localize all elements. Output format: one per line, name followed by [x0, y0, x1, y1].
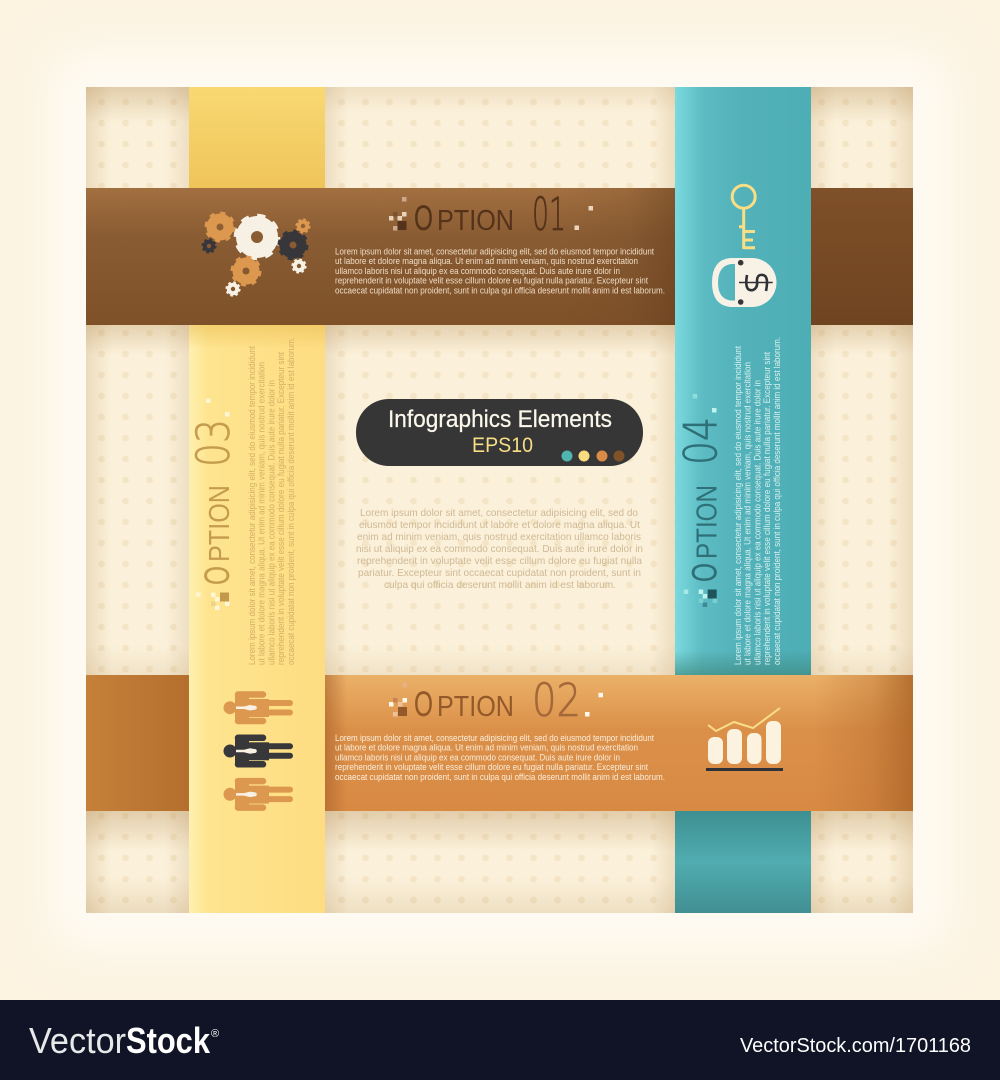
text block: option 04 [733, 337, 782, 665]
ribbon: teal vertical [675, 87, 811, 913]
text block: option 01 [335, 246, 665, 295]
text block: center paragraph [356, 508, 643, 591]
icon: gears [202, 214, 310, 296]
panel: dotted paper [86, 87, 913, 913]
heading: option 03: O [198, 566, 237, 585]
heading: option 04: O [686, 563, 725, 582]
text block: option 03: Lorem ipsum dolor sit amet, consectetur adipisicing elit, sed do eiusmod tempor incididunt [247, 345, 257, 665]
text block: option 04: ut labore et dolore magna aliqua. Ut enim ad minim veniam, quis nostrud exercitation [743, 362, 753, 665]
text block: center paragraph: eiusmod tempor incididunt ut labore et dolore magna aliqua. Ut [359, 520, 640, 531]
text block: option 03: occaecat cupidatat non proident, sunt in culpa qui officia deserunt mollit anim id est laborum. [286, 337, 296, 665]
icon: padlock with dollar sign [712, 258, 776, 307]
footer bar: Stock [126, 1020, 211, 1061]
text block: center paragraph: enim ad minim veniam, quis nostrud exercitation ullamco laboris [357, 532, 641, 543]
center badge: infographics elements: EPS10 [472, 434, 533, 457]
text block: option 02 [335, 733, 665, 782]
text block: option 02: reprehenderit in voluptate velit esse cillum dolore eu fugiat nulla pariatur. Excepteur sint [335, 762, 649, 772]
footer bar: Vector [29, 1020, 126, 1061]
text block: option 04: reprehenderit in voluptate velit esse cillum dolore eu fugiat nulla pariatur. Excepteur sint [762, 351, 772, 665]
text block: center paragraph: pariatur. Excepteur sint occaecat cupidatat non proident, sunt in [358, 568, 641, 579]
text block: option 01: reprehenderit in voluptate velit esse cillum dolore eu fugiat nulla pariatur. Excepteur sint [335, 276, 649, 286]
text block: option 02: Lorem ipsum dolor sit amet, consectetur adipisicing elit, sed do eiusmod tempor incididunt [335, 733, 655, 743]
heading: option 01 [389, 188, 566, 241]
center badge: infographics elements: Infographics Elements [388, 406, 612, 433]
text block: option 02: occaecat cupidatat non proident, sunt in culpa qui officia deserunt mollit anim id est laborum. [335, 772, 665, 782]
footer bar: ® [211, 1028, 219, 1040]
heading: option 02: O [414, 685, 433, 724]
heading: option 04 [675, 417, 728, 607]
footer bar [0, 1000, 1000, 1080]
text block: option 03 [247, 337, 296, 665]
heading: option 02 [389, 674, 581, 727]
text block: option 01: occaecat cupidatat non proident, sunt in culpa qui officia deserunt mollit anim id est laborum. [335, 285, 665, 295]
text block: option 03: ut labore et dolore magna aliqua. Ut enim ad minim veniam, quis nostrud exercitation [257, 362, 267, 665]
text block: option 01: Lorem ipsum dolor sit amet, consectetur adipisicing elit, sed do eiusmod tempor incididunt [335, 246, 655, 256]
decorative squares: option 04 [693, 394, 716, 412]
heading: option 01: PTION [437, 205, 514, 237]
text block: option 04: Lorem ipsum dolor sit amet, consectetur adipisicing elit, sed do eiusmod tempor incididunt [733, 345, 743, 665]
text block: option 04: ullamco laboris nisi ut aliquip ex ea commodo consequat. Duis aute irure dolor in [752, 380, 762, 665]
decorative squares: option 01 [574, 206, 593, 230]
text block: option 03: reprehenderit in voluptate velit esse cillum dolore eu fugiat nulla pariatur. Excepteur sint [276, 351, 286, 665]
text block: center paragraph: Lorem ipsum dolor sit amet, consectetur adipisicing elit, sed do [360, 508, 638, 519]
heading: option 02: 02 [532, 674, 581, 727]
heading: option 03: 03 [187, 419, 240, 467]
text block: center paragraph: culpa qui officia deserunt mollit anim id est laborum. [384, 580, 616, 591]
footer bar: VectorStock.com/1701168 [740, 1035, 971, 1057]
text block: option 04: occaecat cupidatat non proident, sunt in culpa qui officia deserunt mollit anim id est laborum. [772, 337, 782, 665]
heading: option 03: PTION [204, 485, 236, 562]
ribbon: orange horizontal [86, 675, 913, 811]
center badge: infographics elements [356, 399, 643, 466]
text block: option 01: ut labore et dolore magna aliqua. Ut enim ad minim veniam, quis nostrud exercitation [335, 256, 638, 266]
ribbon: yellow vertical [189, 87, 325, 913]
text block: center paragraph: nisi ut aliquip ex ea commodo consequat. Duis aute irure dolor in [356, 544, 643, 555]
text block: center paragraph: reprehenderit in voluptate velit esse cillum dolore eu fugiat nulla [357, 556, 642, 567]
heading: option 01: O [414, 199, 433, 238]
icon: bar chart with trend line [706, 708, 783, 771]
heading: option 04: 04 [675, 417, 728, 465]
heading: option 04: PTION [692, 485, 724, 559]
text block: option 03: ullamco laboris nisi ut aliquip ex ea commodo consequat. Duis aute irure dolor in [266, 380, 276, 665]
text block: option 01: ullamco laboris nisi ut aliquip ex ea commodo consequat. Duis aute irure dolor in [335, 266, 620, 276]
heading: option 01: 01 [532, 188, 566, 241]
text block: option 02: ullamco laboris nisi ut aliquip ex ea commodo consequat. Duis aute irure dolor in [335, 752, 620, 762]
icon: key [732, 185, 755, 249]
icon: three people [224, 692, 290, 811]
text block: option 02: ut labore et dolore magna aliqua. Ut enim ad minim veniam, quis nostrud exercitation [335, 743, 638, 753]
heading: option 03 [187, 419, 240, 610]
decorative squares: option 03 [206, 398, 230, 416]
ribbon: brown horizontal [86, 188, 913, 325]
decorative squares: option 02 [585, 693, 603, 716]
heading: option 02: PTION [437, 691, 514, 723]
